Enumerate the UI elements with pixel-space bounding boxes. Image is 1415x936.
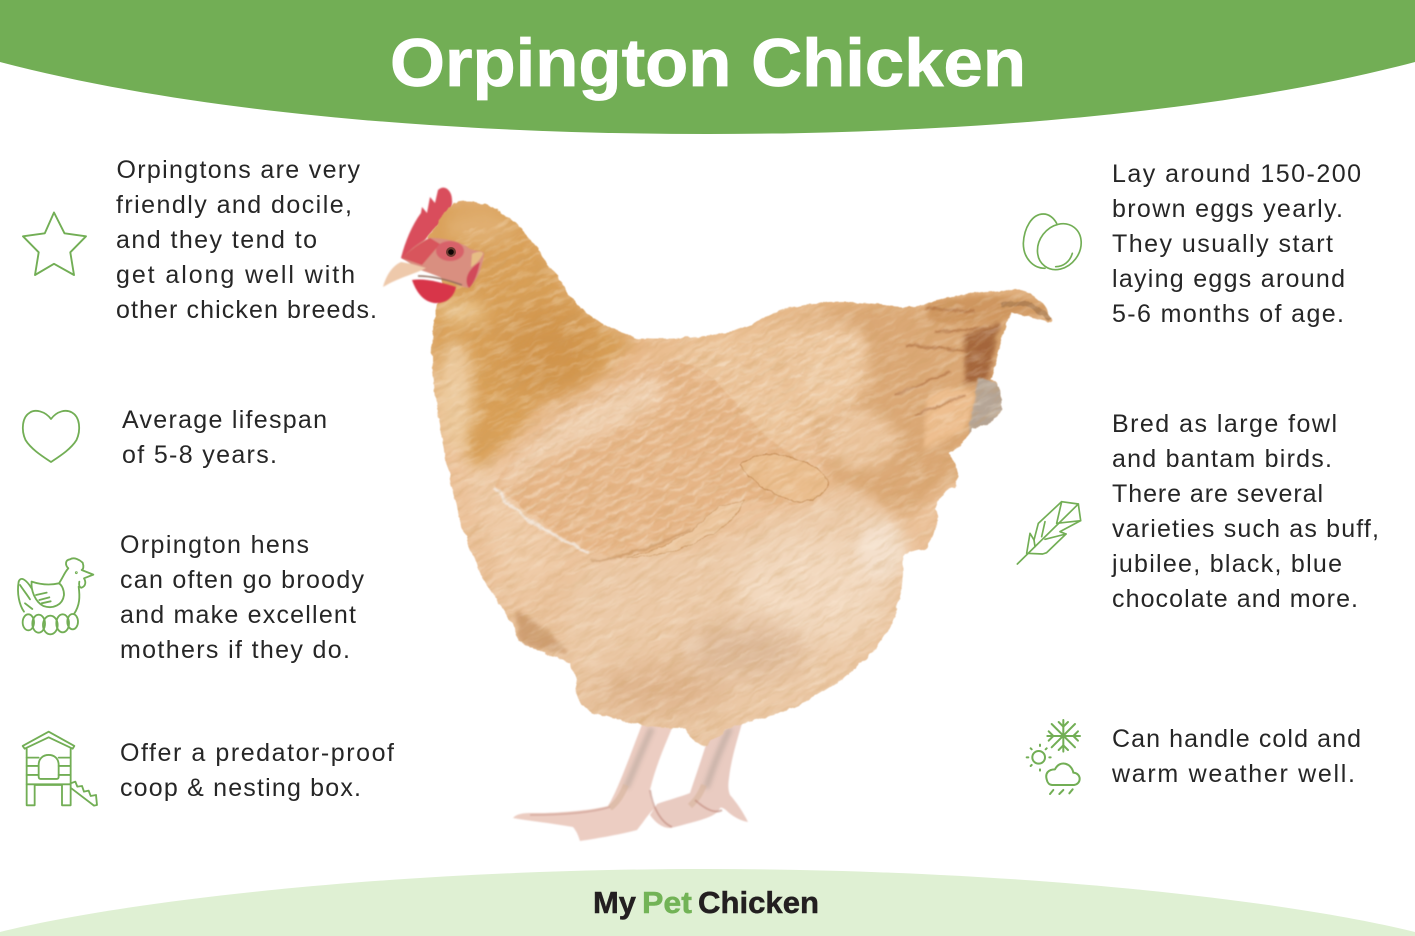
icon: star xyxy=(23,212,86,275)
text: varieties: chocolate and more. xyxy=(1112,585,1358,613)
text: coop advice: Offer a predator-proof xyxy=(120,739,394,767)
text: varieties: Bred as large fowl xyxy=(1112,410,1337,438)
text: varieties: There are several xyxy=(1112,480,1323,508)
text: egg laying: brown eggs yearly. xyxy=(1112,195,1343,223)
body feathers xyxy=(427,200,1053,747)
logo: My xyxy=(593,885,637,920)
text: varieties: varieties such as buff, xyxy=(1112,515,1379,543)
icon: weather xyxy=(1027,720,1080,794)
text: friendly temperament: and they tend to xyxy=(116,226,317,254)
text: lifespan: of 5-8 years. xyxy=(122,441,277,469)
lower fluff xyxy=(566,490,908,725)
text: broody mothers: Orpington hens xyxy=(120,531,309,559)
text: egg laying xyxy=(1112,160,1361,328)
icon: heart xyxy=(23,411,79,462)
text: egg laying: laying eggs around xyxy=(1112,265,1345,293)
text: coop advice: coop & nesting box. xyxy=(120,774,361,802)
text: broody mothers xyxy=(120,531,364,664)
text: varieties: and bantam birds. xyxy=(1112,445,1332,473)
face xyxy=(383,238,484,303)
neck hackle xyxy=(425,205,640,470)
text: lifespan xyxy=(122,406,327,469)
text: friendly temperament: Orpingtons are very xyxy=(116,156,360,184)
wing scallops xyxy=(495,330,864,558)
text: coop advice xyxy=(120,739,394,802)
logo: Chicken xyxy=(698,885,819,920)
text: egg laying: 5-6 months of age. xyxy=(1112,300,1344,328)
text: varieties xyxy=(1111,410,1379,613)
header banner xyxy=(0,0,1415,134)
tail streaks xyxy=(895,308,985,415)
text: friendly temperament: get along well with xyxy=(116,261,355,289)
icon: coop xyxy=(23,732,97,806)
text: weather hardiness: Can handle cold and xyxy=(1112,725,1361,753)
footer banner xyxy=(0,869,1415,936)
back lighter feathers xyxy=(671,311,840,430)
icon: feather xyxy=(1017,502,1081,564)
text: friendly temperament: other chicken breeds. xyxy=(116,296,377,324)
text: friendly temperament: friendly and docile, xyxy=(116,191,352,219)
text: broody mothers: mothers if they do. xyxy=(120,636,350,664)
text: egg laying: They usually start xyxy=(1112,230,1333,258)
logo: Pet xyxy=(642,885,692,920)
chicken photo illustration xyxy=(382,186,1082,842)
text: broody mothers: can often go broody xyxy=(120,566,364,594)
legs and feet xyxy=(513,720,748,841)
comb xyxy=(401,188,452,262)
feather texture xyxy=(435,320,999,739)
text: varieties: jubilee, black, blue xyxy=(1111,550,1342,578)
icon: broody hen on eggs xyxy=(18,558,93,634)
wing xyxy=(495,361,830,558)
text: weather hardiness xyxy=(1111,725,1361,788)
text: weather hardiness: warm weather well. xyxy=(1111,760,1355,788)
saddle and tail xyxy=(807,290,1051,520)
icon: eggs xyxy=(1023,214,1090,278)
title: Orpington Chicken xyxy=(390,25,1026,101)
text: egg laying: Lay around 150-200 xyxy=(1112,160,1361,188)
text: broody mothers: and make excellent xyxy=(120,601,356,629)
text: lifespan: Average lifespan xyxy=(122,406,327,434)
text: friendly temperament xyxy=(116,156,377,324)
logo xyxy=(593,885,819,920)
